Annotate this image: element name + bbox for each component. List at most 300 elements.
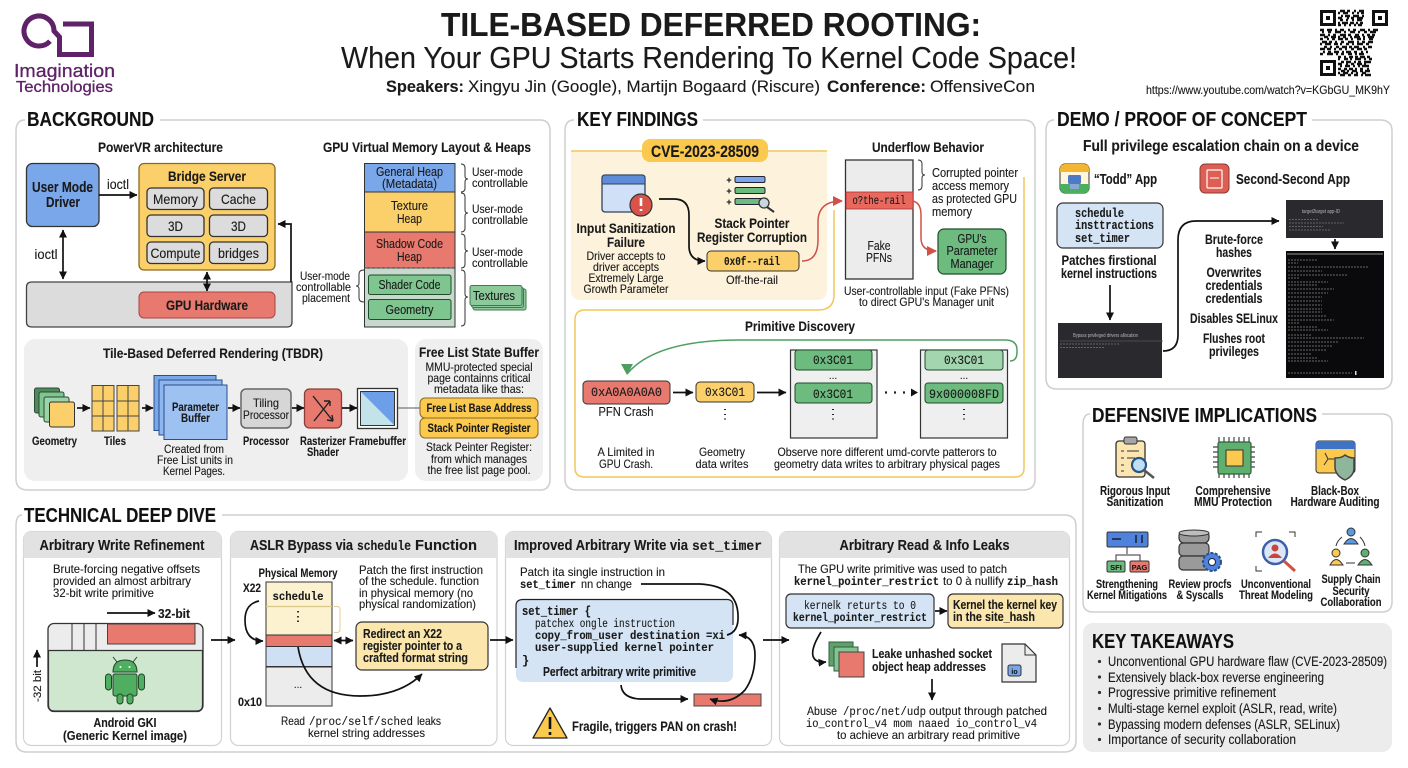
card: improved arbitrary write: Improved Arbitrary Write via [514, 537, 689, 554]
gpu hardware box [26, 282, 292, 327]
card: ASLR bypass [230, 532, 497, 746]
panel: free list state buffer: page containns critical [428, 371, 530, 385]
heading: demo: DEMO / PROOF OF CONCEPT [1057, 109, 1307, 131]
item: strengthening kernel mitigations: Kernel Mitigations [1087, 588, 1167, 602]
arrow: feedback loop [627, 340, 1017, 374]
primitive captions: Geometry [699, 445, 745, 459]
text: stack pointer corruption [697, 215, 807, 245]
card: ASLR bypass: schedule [357, 539, 411, 555]
user mode driver box: Driver [46, 194, 80, 211]
heading: key takeaways: KEY TAKEAWAYS [1092, 631, 1234, 653]
value box: off the rail [707, 251, 799, 287]
arrow: bridge to hardware [206, 272, 208, 291]
text: input sanitization failure: Input Sanitization [576, 220, 676, 236]
icon: stack bars with magnifier [726, 175, 774, 212]
arrow: failure to corruption [659, 199, 705, 261]
shadow code heap: Shadow Code [376, 236, 443, 251]
shadow code heap [364, 232, 455, 268]
braces and controllable labels: controllable [472, 256, 528, 270]
item: review procfs and syscalls: & Syscalls [1176, 588, 1224, 602]
code box: todd functions: set_timer [1075, 232, 1130, 246]
list: takeaways: Bypassing modern defenses (ASLR, SELinux) [1108, 717, 1340, 732]
description: Patch the first instruction [359, 563, 483, 577]
item: black-box hardware auditing: Black-Box [1311, 484, 1359, 498]
heading: PowerVR architecture: PowerVR architecture [98, 139, 223, 155]
diagram: physical memory column: schedule [272, 590, 324, 604]
caption: abuse proc net udp: to achieve an arbitrary read primitive [837, 728, 1020, 742]
list: exploit steps: Brute-force [1205, 232, 1263, 247]
diagram: physical memory column: Physical Memory [258, 566, 338, 580]
vertical label: 32-bit [32, 650, 44, 702]
arrow: to second screenshot [1163, 221, 1279, 351]
description: The GPU write primitive was used to patch [798, 562, 1007, 576]
GPU parameter manager box: Parameter [946, 244, 998, 258]
list: exploit steps: credentials [1206, 278, 1262, 293]
caption: abuse proc net udp: io_control_v4 mom naaed io_control_v4 [806, 717, 1037, 731]
text: input sanitization failure [576, 220, 676, 296]
list: exploit steps: Disables SELinux [1190, 311, 1278, 326]
icon: parameter buffer: Parameter [172, 400, 219, 414]
text: input sanitization failure: Extremely Large [588, 271, 664, 285]
primitive captions: A Limited in [598, 445, 654, 459]
shader and geometry region: Geometry [386, 302, 434, 317]
shader and geometry region: Shader Code [378, 277, 440, 292]
code box: todd functions: schedule [1075, 207, 1124, 221]
caption: leak: Read [281, 714, 305, 728]
memory page A: 0x3C01 [813, 354, 853, 368]
item: review procfs and syscalls [1168, 530, 1232, 602]
panel: key takeaways [1083, 623, 1392, 752]
item: comprehensive MMU protection [1194, 437, 1272, 509]
GPU parameter manager box: GPU's [958, 232, 986, 246]
card: ASLR bypass: Function [415, 537, 477, 554]
icon: input failure window [602, 175, 652, 216]
text: leak addresses: object heap addresses [872, 659, 986, 674]
panel: TBDR pipeline [24, 339, 408, 481]
icon: android [106, 657, 144, 704]
free list fields [420, 398, 538, 438]
code box: kernel pointer [786, 594, 934, 628]
text: input sanitization failure: driver accepts [593, 260, 659, 274]
description [520, 565, 665, 592]
icon: parameter buffer: Created from [164, 442, 224, 456]
item: unconventional threat modeling: Unconventional [1241, 577, 1311, 591]
item: review procfs and syscalls: Review procfs [1168, 577, 1232, 591]
tiling processor: Processor [243, 434, 289, 448]
description [794, 562, 1058, 589]
braces and controllable labels [296, 164, 528, 326]
icon: second-second app [1200, 164, 1350, 193]
icon: parameter buffer [154, 376, 233, 478]
shader and geometry region [364, 268, 455, 327]
arrow: x22 loop [245, 601, 263, 641]
list: exploit steps: privileges [1209, 344, 1259, 359]
connector: primitive section outline [575, 177, 1024, 477]
description: physical randomization) [359, 597, 476, 611]
screenshot: root terminal [1286, 251, 1384, 378]
title block: Speakers: [386, 77, 464, 96]
item: unconventional threat modeling [1239, 532, 1313, 602]
arrow: corruption to underflow [802, 201, 842, 261]
item: rigorous input sanitization [1100, 437, 1171, 509]
icon: parameter buffer: Kernel Pages. [163, 464, 225, 478]
QR code and video URL [1146, 11, 1390, 97]
bridge server box: Bridge Server [168, 168, 246, 184]
diagram: physical memory column: ... [294, 680, 302, 691]
heading: key findings: KEY FINDINGS [577, 109, 698, 131]
description: in physical memory (no [359, 586, 473, 600]
screenshot: phone terminal one [1058, 323, 1163, 378]
callout: corrupted pointer: as protected GPU [932, 192, 1017, 206]
item: strengthening kernel mitigations: SFI [1110, 563, 1122, 572]
list: takeaways: Multi-stage kernel exploit (ASLR, read, write) [1108, 701, 1337, 716]
bridge server box [139, 164, 275, 270]
warning: fragile [533, 708, 737, 738]
icon: parameter buffer: Buffer [181, 411, 210, 425]
icon: tiles: Tiles [104, 434, 126, 448]
logo: Imagination Technologies [14, 16, 115, 96]
caption: patches instructions: kernel instructions [1061, 266, 1157, 281]
list: takeaways: Importance of security collaboration [1108, 732, 1296, 747]
text: leak addresses [872, 646, 993, 674]
arrow: ioctl driver to hardware: ioctl [34, 246, 58, 262]
caption: leak: leaks [417, 714, 441, 728]
description: to 0 à nullify [943, 574, 1004, 588]
panel: defensive implications [1083, 405, 1392, 612]
bridge server box: bridges [218, 245, 259, 261]
list: exploit steps: Overwrites [1206, 265, 1262, 280]
arrow: code to red block [621, 685, 688, 699]
callout: redirect X22: register pointer to a [363, 639, 463, 653]
callout: kernel key: Kernel the kernel key [953, 598, 1057, 612]
diagram: underflow memory column: o?the-rail [852, 194, 906, 208]
ellipsis arrow [885, 388, 918, 396]
icon: stack bars with magnifier: + [726, 175, 732, 185]
icon: Todd app: “Todd” App [1094, 172, 1157, 188]
logo: Imagination Technologies: Technologies [16, 79, 113, 96]
CVE section [571, 139, 827, 300]
arrow: crash to write [673, 392, 693, 394]
code block: set_timer: set_timer { [522, 605, 591, 619]
braces and controllable labels: User-mode [472, 245, 523, 259]
code box: todd functions: insttractions [1075, 219, 1154, 233]
list: takeaways: Progressive primitive refinement [1108, 685, 1276, 700]
arrow: hardware feedback to bridge [278, 224, 291, 282]
item: strengthening kernel mitigations: PAG [1132, 563, 1148, 572]
description: nn change [581, 577, 632, 591]
icon: document [1002, 644, 1036, 682]
screenshot: phone terminal two: target2target app-ID [1302, 209, 1340, 215]
free list fields: Stack Pointer Register [428, 421, 531, 435]
card: improved arbitrary write [506, 532, 772, 746]
code box: kernel pointer: kernel_pointer_restrict [793, 611, 927, 625]
title block: Xingyu Jin (Google), Martijn Bogaard (Riscure) [468, 77, 820, 96]
caption: patches instructions: Patches firstional [1062, 253, 1156, 268]
user mode driver box [26, 164, 99, 226]
item: comprehensive MMU protection: Comprehensive [1196, 484, 1271, 498]
PFN crash box [583, 381, 670, 419]
heading: underflow behavior: Underflow Behavior [872, 139, 984, 155]
list: exploit steps: hashes [1216, 245, 1252, 260]
memory page B: ... [960, 371, 968, 382]
caption: android GKI [63, 715, 187, 743]
caption: android GKI: Android GKI [94, 715, 156, 730]
description: of the schedule. function [359, 574, 479, 588]
geometry write box: 0x3C01 [705, 386, 745, 400]
code block: set_timer: user-supplied kernel pointer [535, 641, 714, 655]
textures stack: Textures [473, 288, 515, 303]
panel: background [16, 109, 550, 490]
arrow: down [931, 679, 933, 700]
arrow: write to memory pages [757, 392, 786, 394]
warning: fragile: Fragile, triggers PAN on crash! [572, 719, 737, 734]
gpu hardware box: GPU Hardware [166, 297, 248, 313]
GPU parameter manager box [938, 229, 1006, 274]
diagram: underflow memory column: Fake [868, 238, 890, 253]
callout: redirect X22 [356, 622, 488, 670]
section: primitive discovery: Primitive Discovery [745, 318, 855, 334]
description: zip_hash [1007, 576, 1058, 589]
card: arbitrary read and info leaks: Arbitrary Read & Info Leaks [840, 537, 1010, 554]
braces and controllable labels: controllable [472, 176, 528, 190]
text: stack pointer corruption: Register Corruption [697, 229, 807, 245]
caption: abuse proc net udp [806, 704, 1047, 742]
double arrow: memory to redirect box [334, 640, 353, 642]
arrow: red block back to code [710, 635, 755, 701]
primitive captions: GPU Crash. [599, 457, 653, 471]
card: arbitrary read and info leaks [780, 532, 1070, 746]
panel: free list state buffer: Stack Peinter Register: [426, 440, 532, 454]
arrow: ioctl driver to bridge: ioctl [107, 176, 129, 192]
diagram: android kernel image [48, 624, 203, 712]
underflow caption [844, 284, 1009, 309]
caption: abuse proc net udp: Abuse [807, 704, 837, 718]
item: comprehensive MMU protection: MMU Protection [1194, 495, 1272, 509]
panel: free list state buffer: metadata like thas: [434, 382, 524, 396]
memory page B [920, 350, 1008, 438]
bridge server box: Cache [221, 191, 256, 207]
primitive captions: geometry data writes to arbitrary physical pages [774, 457, 1000, 471]
braces and controllable labels: User-mode [300, 269, 350, 283]
braces and controllable labels: controllable [472, 213, 528, 227]
diagram: physical memory column [238, 566, 338, 709]
card: arbitrary write refinement: Arbitrary Write Refinement [40, 537, 204, 554]
arrow: underflow to manager [913, 201, 936, 251]
callout: corrupted pointer [918, 160, 1018, 219]
arrow: card one to card two [211, 639, 235, 641]
CVE section: CVE-2023-28509 [651, 142, 759, 161]
list: exploit steps [1190, 232, 1278, 359]
PFN crash box: 0xA0A0A0A0 [591, 385, 662, 400]
memory page A [790, 350, 877, 438]
value box: off the rail: Off-the-rail [726, 273, 778, 287]
text: input sanitization failure: Driver accepts to [586, 249, 666, 263]
code block: set_timer: Perfect arbitrary write primitive [543, 665, 696, 679]
title block: TILE-BASED DEFERRED ROOTING: [441, 6, 981, 43]
GPU parameter manager box: Manager [950, 257, 994, 271]
code box: kernel pointer: kerneⅼk returts to 0 [804, 599, 916, 613]
arrow: ioctl driver to bridge [99, 176, 137, 195]
description [359, 563, 483, 611]
title block: Conference: [827, 77, 926, 96]
arrow: screenshot to terminal [1334, 239, 1336, 249]
icon: stack bars with magnifier: + [726, 186, 732, 196]
callout: kernel key [948, 594, 1063, 628]
callout: corrupted pointer: Corrupted pointer [932, 166, 1018, 180]
tiling processor [241, 389, 291, 448]
bridge server box: 3D [231, 218, 246, 234]
caption: patches instructions [1061, 253, 1157, 281]
memory page A: 0x3C01 [813, 388, 853, 402]
icon: geometry stack [32, 388, 77, 448]
screenshot: phone terminal two [1286, 200, 1383, 238]
item: rigorous input sanitization: Sanitization [1106, 495, 1164, 509]
logo: Imagination Technologies: Imagination [14, 61, 115, 81]
tiling processor: Processor [243, 408, 289, 422]
bridge server box: 3D [168, 218, 183, 234]
description: provided an almost arbitrary [53, 574, 191, 588]
diagram: PowerVR architecture [26, 164, 292, 327]
code box: todd functions [1057, 203, 1163, 248]
pipeline arrows [77, 407, 357, 409]
texture heap [364, 192, 455, 232]
list: exploit steps: Flushes root [1203, 331, 1265, 346]
arrow: 32-bit width [107, 606, 191, 621]
rasterizer shader icon [300, 389, 346, 459]
memory page B: 9x000008FD [929, 388, 999, 402]
heading: memory layout: GPU Virtual Memory Layout & Heaps [323, 139, 531, 155]
braces and controllable labels: User-mode [472, 202, 523, 216]
description: 32-bit write primitive [53, 586, 154, 600]
arrow: card two to card three [490, 639, 513, 641]
primitive captions [598, 445, 1000, 471]
diagram: underflow memory column [846, 160, 913, 279]
arrow: 32-bit width: 32-bit [158, 606, 191, 621]
item: supply chain collaboration [1320, 528, 1382, 609]
caption: leak: kernel string addresses [308, 726, 425, 740]
underflow caption: User-controllable input (Fake PFNs) [844, 284, 1009, 298]
arrow: memory to redirect curve [298, 647, 422, 696]
panel: free list state buffer: from which manages [431, 452, 527, 466]
card: arbitrary write refinement [24, 532, 222, 746]
text: stack pointer corruption: Stack Pointer [714, 215, 790, 231]
diagram: physical memory column: X22 [243, 581, 261, 595]
subheading: escalation chain: Full privilege escalation chain on a device [1083, 138, 1359, 155]
geometry write box [696, 382, 754, 420]
icon: second-second app: Second-Second App [1236, 172, 1350, 188]
list: exploit steps: credentials [1206, 291, 1262, 306]
value box: off the rail: 0x0f--rail [724, 255, 780, 269]
panel: technical deep dive [16, 505, 1076, 752]
general heap: General Heap [376, 164, 443, 179]
textures stack [470, 286, 526, 310]
arrow: card three to card four [763, 639, 789, 641]
panel: free list state buffer [398, 339, 543, 481]
item: supply chain collaboration: Security [1332, 584, 1370, 598]
callout: corrupted pointer: access memory [932, 179, 1010, 193]
braces and controllable labels: User-mode [472, 165, 523, 179]
callout: redirect X22: Redirect an X22 [363, 627, 442, 641]
card: ASLR bypass: ASLR Bypass via [250, 537, 354, 554]
underflow caption: to direct GPU's Manager unit [859, 295, 995, 309]
caption: leak: /proc/self/sched [309, 715, 413, 729]
PFN crash box: PFN Crash [598, 404, 654, 419]
title block: OffensiveCon [930, 77, 1035, 96]
bridge server box: Compute [150, 245, 201, 261]
diagram: physical memory column: 0x10 [238, 695, 262, 709]
panel: TBDR pipeline: Tile-Based Deferred Rendering (TBDR) [103, 345, 323, 361]
rasterizer shader icon: Shader [307, 445, 339, 459]
framebuffer icon: Framebuffer [349, 434, 406, 448]
item: strengthening kernel mitigations: Strengthening [1096, 577, 1158, 591]
arrow: to leak stack [813, 632, 826, 662]
description [53, 562, 200, 600]
braces and controllable labels: placement [302, 291, 351, 305]
text: leak addresses: Leake unhashed socket [872, 646, 993, 661]
shadow code heap: Heap [397, 249, 422, 264]
caption: leak [281, 714, 441, 740]
arrow: to kernel key [935, 610, 947, 612]
memory page A: ... [829, 371, 837, 382]
connector: set_timer to code [641, 584, 738, 635]
title block: When Your GPU Starts Rendering To Kernel Code Space! [341, 40, 1077, 75]
caption: abuse proc net udp: /proc/net/udp [843, 705, 926, 719]
primitive captions: Observe nore different umd-corvte patterors to [778, 445, 997, 459]
screenshot: phone terminal one: Bypass privileged drivers allocation [1073, 333, 1138, 339]
callout: redirect X22: crafted format string [363, 651, 468, 665]
memory page B: 0x3C01 [944, 354, 984, 368]
texture heap: Heap [397, 211, 422, 226]
heading: defensive implications: DEFENSIVE IMPLICATIONS [1092, 405, 1317, 427]
description: Brute-forcing negative offsets [53, 562, 200, 576]
item: rigorous input sanitization: Rigorous Input [1100, 484, 1171, 498]
panel: free list state buffer: Free List State Buffer [419, 344, 539, 360]
diagram: heap stack [296, 164, 528, 327]
item: supply chain collaboration: Collaboration [1320, 595, 1382, 609]
icon: document: io [1011, 669, 1018, 676]
icon: object stack [829, 642, 864, 677]
heading: technical deep dive: TECHNICAL DEEP DIVE [24, 505, 216, 527]
item: strengthening kernel mitigations [1087, 532, 1167, 602]
text: input sanitization failure: Growth Parameter [584, 282, 668, 296]
item: supply chain collaboration: Supply Chain [1322, 572, 1380, 586]
icon: tiles [92, 386, 139, 448]
title block [341, 6, 1077, 96]
panel: free list state buffer: MMU-protected special [426, 360, 532, 374]
red memory block [694, 694, 761, 706]
heading: background: BACKGROUND [27, 109, 154, 131]
callout: corrupted pointer: memory [932, 205, 973, 219]
arrow: down to screenshot [1109, 285, 1111, 320]
list: takeaways [1098, 654, 1387, 747]
text: input sanitization failure: Failure [607, 234, 645, 250]
free list fields: Free List Base Address [426, 401, 532, 415]
item: black-box hardware auditing: Hardware Auditing [1290, 495, 1380, 509]
caption: abuse proc net udp: output through patched [929, 704, 1047, 718]
description: set_timer [520, 579, 576, 592]
user mode driver box: User Mode [32, 179, 93, 196]
icon: geometry stack: Geometry [32, 434, 77, 448]
panel: key findings [565, 109, 1035, 490]
bridge server box: Memory [153, 191, 198, 207]
code block: set_timer [516, 600, 733, 682]
diagram: underflow memory column: PFNs [866, 250, 892, 265]
list: takeaways: Extensively black-box reverse engineering [1108, 670, 1324, 685]
section: primitive discovery [583, 318, 1017, 471]
general heap [364, 164, 455, 192]
panel: free list state buffer: the free list page pool. [428, 463, 530, 477]
card: improved arbitrary write: set_timer [692, 539, 762, 555]
